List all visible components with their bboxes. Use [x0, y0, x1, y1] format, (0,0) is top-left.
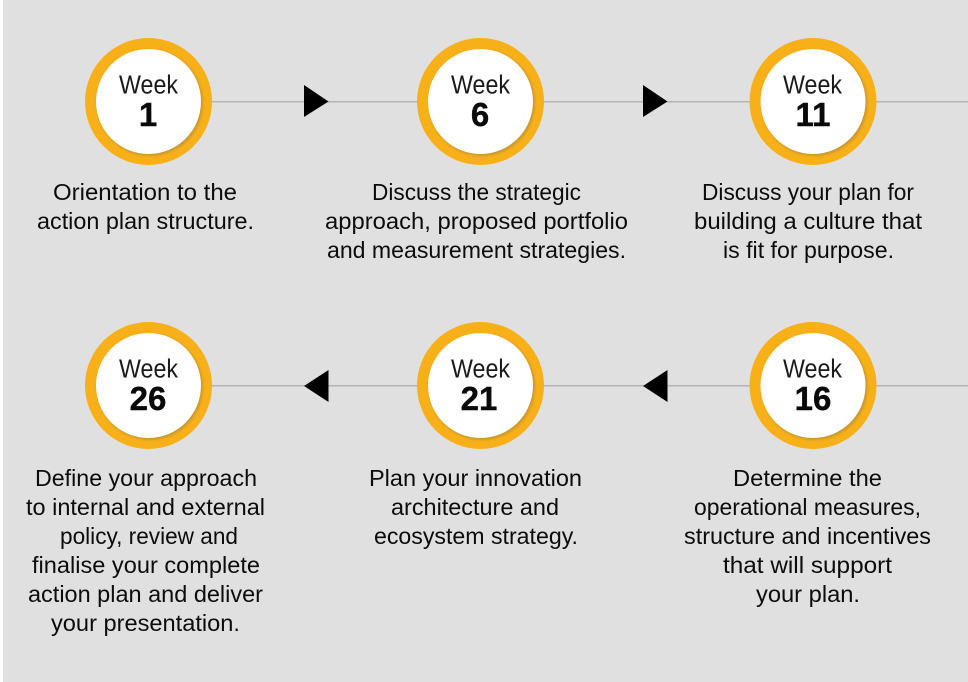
week 1 description: action plan structure. [37, 208, 254, 234]
week 16 badge [750, 322, 876, 449]
week 1 badge [85, 38, 212, 165]
week 26 description: action plan and deliver [28, 581, 263, 607]
week 16 description: operational measures, [694, 494, 921, 520]
week 26 description [26, 465, 265, 636]
week 26 description: policy, review and [60, 523, 238, 549]
week 1 description: Orientation to the [53, 179, 237, 205]
week 16 description: your plan. [756, 581, 860, 607]
week 6 description: and measurement strategies. [327, 237, 626, 263]
arrow: week 26 from week 21 [304, 370, 328, 402]
week 26 description: finalise your complete [32, 552, 260, 578]
week 21 description [369, 465, 582, 549]
week 16 description: structure and incentives [684, 523, 931, 549]
week 26 badge: 26 [130, 380, 166, 417]
week 26 description: your presentation. [51, 610, 240, 636]
week 21 badge [417, 322, 544, 449]
week 1 badge: 1 [139, 96, 157, 133]
week 6 description [325, 179, 628, 263]
week 21 badge: Week [451, 356, 510, 384]
timeline connector top row [212, 101, 968, 102]
week 11 description: is fit for purpose. [723, 237, 894, 263]
week 26 badge: Week [119, 356, 178, 384]
week 26 description: Define your approach [35, 465, 257, 491]
week 11 badge: 11 [796, 96, 830, 133]
week 21 description: Plan your innovation [369, 465, 582, 491]
week 6 badge: 6 [471, 96, 489, 133]
week 6 description: Discuss the strategic [372, 179, 581, 205]
week 16 description: Determine the [733, 465, 882, 491]
week 21 badge: 21 [461, 380, 497, 417]
arrow: week 21 from week 16 [643, 370, 668, 402]
week 21 description: architecture and [391, 494, 559, 520]
week 6 badge: Week [451, 72, 510, 100]
week 6 description: approach, proposed portfolio [325, 208, 628, 234]
week 11 badge: Week [783, 72, 842, 100]
week 16 description [684, 465, 931, 607]
week 16 badge: 16 [795, 380, 831, 417]
week 11 description: Discuss your plan for [702, 179, 914, 205]
week 21 description: ecosystem strategy. [374, 523, 578, 549]
week 16 badge: Week [783, 356, 842, 384]
arrow: week 6 to week 11 [643, 85, 668, 117]
week 1 badge: Week [119, 72, 178, 100]
arrow: week 1 to week 6 [304, 85, 328, 117]
timeline connector bottom row [212, 385, 968, 386]
week 11 badge [750, 38, 876, 165]
week 26 description: to internal and external [26, 494, 265, 520]
week 6 badge [417, 38, 544, 165]
week 1 description [37, 179, 254, 234]
week 11 description: building a culture that [694, 208, 922, 234]
week 11 description [694, 179, 922, 263]
week 16 description: that will support [723, 552, 892, 578]
week 26 badge [85, 322, 212, 449]
